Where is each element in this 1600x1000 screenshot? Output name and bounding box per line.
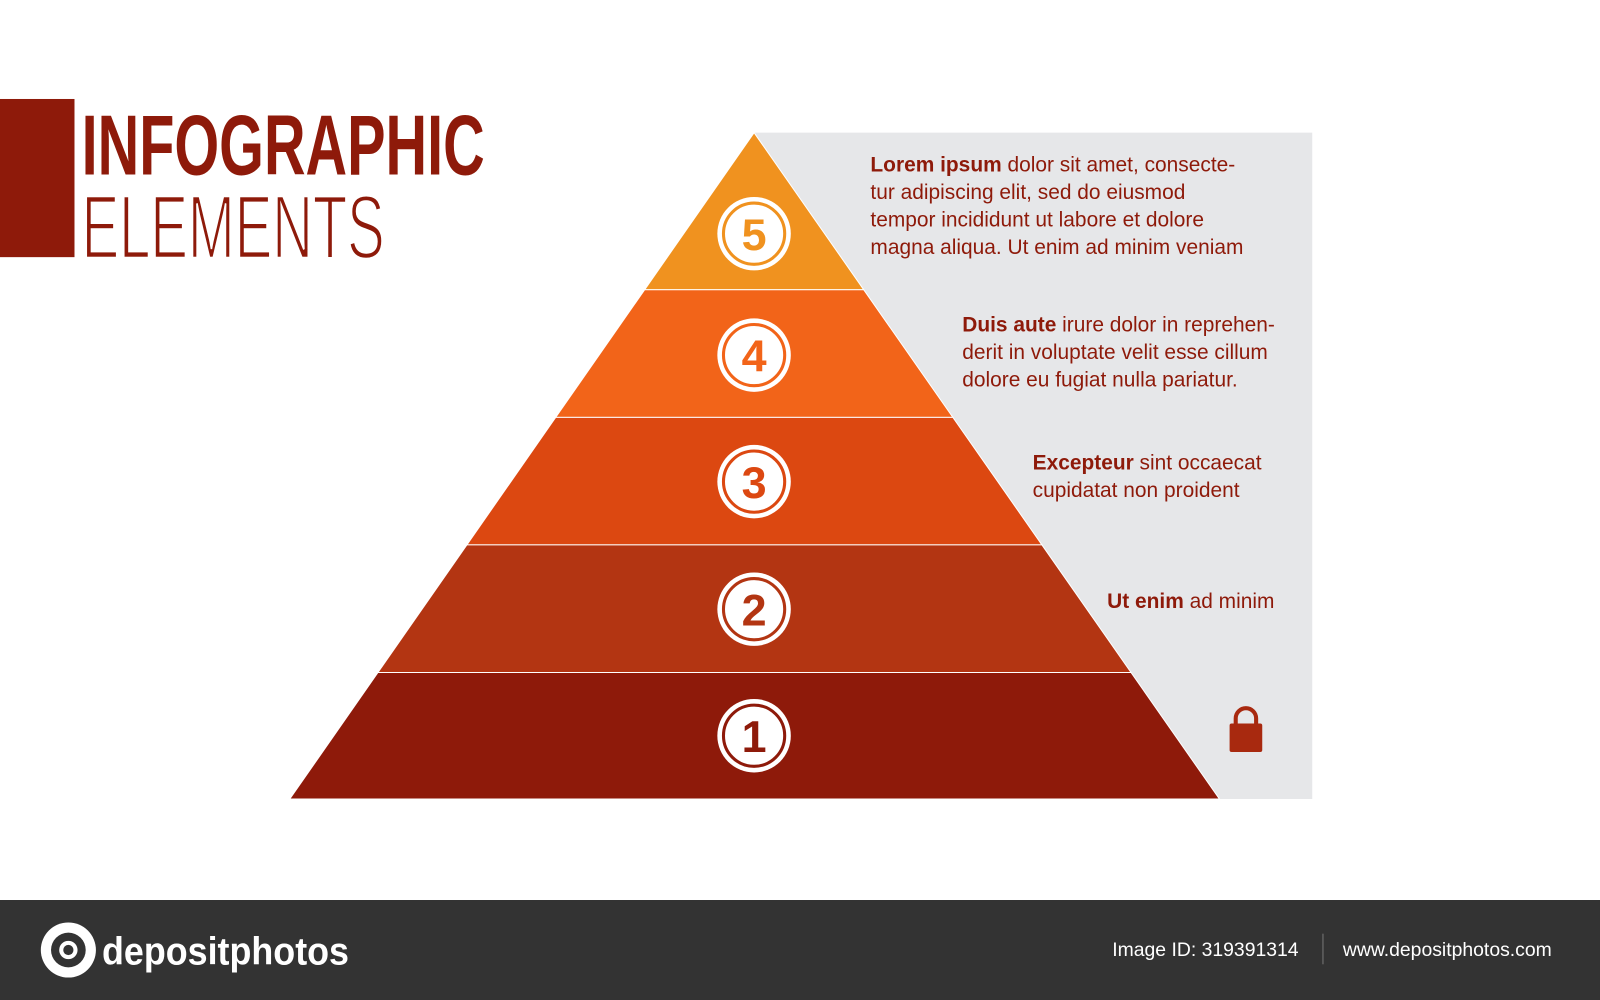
icon: lock xyxy=(1230,708,1262,752)
pyramid xyxy=(290,133,1219,799)
level 3 xyxy=(467,417,1042,545)
text block 4: dolore eu fugiat nulla pariatur. xyxy=(962,369,1238,392)
footer logo icon xyxy=(41,922,96,978)
level 5 xyxy=(645,133,864,290)
badge 5 xyxy=(717,197,791,270)
level 1 xyxy=(290,672,1219,799)
badge 4 xyxy=(717,318,791,392)
text block 4 xyxy=(962,314,1275,392)
text block 5: tur adipiscing elit, sed do eiusmod xyxy=(870,181,1185,204)
title: INFOGRAPHIC: INFOGRAPHIC xyxy=(82,97,485,193)
badge 1 xyxy=(717,699,791,772)
footer image id: Image ID: 319391314 xyxy=(1112,939,1299,961)
footer bar xyxy=(0,900,1600,1000)
level 4 xyxy=(556,290,953,417)
badge 3 xyxy=(717,445,791,518)
badge 2 xyxy=(717,572,791,646)
number badges xyxy=(717,197,791,772)
text block 5: magna aliqua. Ut enim ad minim veniam xyxy=(870,236,1243,259)
footer url: www.depositphotos.com xyxy=(1342,939,1552,961)
badge 4: 4 xyxy=(742,330,767,381)
badge 3: 3 xyxy=(742,457,767,508)
text block 4: derit in voluptate velit esse cillum xyxy=(962,341,1268,364)
text block 5: Lorem ipsum dolor sit amet, consecte- xyxy=(870,153,1235,176)
text block 2: Ut enim ad minim xyxy=(1107,590,1274,613)
text block 5: tempor incididunt ut labore et dolore xyxy=(870,209,1204,232)
text block 3: Excepteur sint occaecat xyxy=(1033,451,1262,474)
badge 2: 2 xyxy=(742,585,767,636)
text block 4: Duis aute irure dolor in reprehen- xyxy=(962,314,1275,337)
badge 5: 5 xyxy=(742,209,767,260)
text block 5 xyxy=(870,153,1243,259)
text block 3: cupidatat non proident xyxy=(1033,479,1240,502)
badge 1: 1 xyxy=(742,711,767,762)
footer brand text: depositphotos xyxy=(102,930,349,973)
title accent bar xyxy=(0,99,74,257)
text block 3 xyxy=(1033,451,1262,502)
title block xyxy=(0,97,485,278)
subtitle: ELEMENTS: ELEMENTS xyxy=(82,178,385,278)
panel: gray text background xyxy=(755,133,1312,799)
level 2 xyxy=(378,545,1131,672)
